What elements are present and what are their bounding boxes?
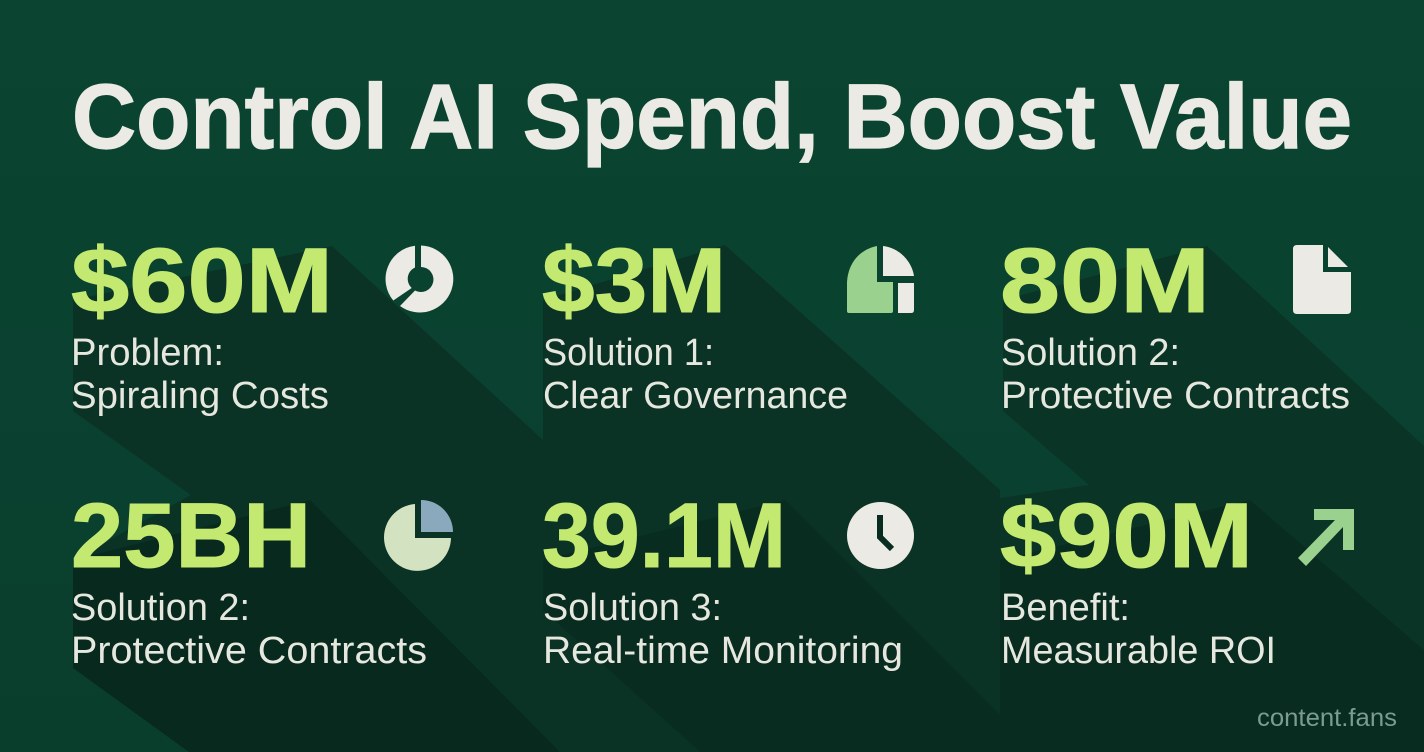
label: Benefit:	[1001, 587, 1130, 629]
label line 2: Spiraling Costs	[71, 375, 329, 417]
stat: 39.1M: 39.1M	[542, 485, 786, 587]
panel: protective contracts bottom	[71, 485, 453, 672]
icon: segmented shape	[847, 246, 914, 313]
panel: clear governance	[542, 230, 914, 417]
panel: measurable roi	[1000, 485, 1354, 672]
icon: pie chart	[384, 500, 453, 571]
stat: $60M: $60M	[71, 230, 333, 332]
label: Solution 2:	[71, 587, 250, 629]
stat: $90M: $90M	[1000, 485, 1253, 587]
icon: clock	[847, 502, 914, 569]
label: Solution 2:	[1001, 332, 1180, 374]
stat: $3M: $3M	[542, 230, 726, 332]
label line 2: Protective Contracts	[71, 630, 427, 672]
label: Solution 3:	[543, 587, 722, 629]
watermark: content.fans	[1257, 704, 1397, 732]
stat: 25BH: 25BH	[71, 485, 311, 587]
panel: real-time monitoring	[542, 485, 914, 672]
icon: arrow	[1298, 509, 1354, 566]
icon: donut chart	[386, 246, 453, 312]
label: Solution 1:	[543, 332, 714, 374]
label line 2: Measurable ROI	[1001, 630, 1276, 672]
stat: 80M: 80M	[1000, 230, 1210, 332]
label line 2: Clear Governance	[543, 375, 848, 417]
label: Problem:	[71, 332, 224, 374]
label line 2: Protective Contracts	[1001, 375, 1350, 417]
panel: protective contracts top	[1000, 230, 1351, 417]
label line 2: Real-time Monitoring	[543, 630, 903, 672]
title: Control AI Spend, Boost Value	[72, 66, 1352, 168]
icon: document	[1293, 245, 1351, 314]
panel: problem spiraling costs	[71, 230, 453, 417]
